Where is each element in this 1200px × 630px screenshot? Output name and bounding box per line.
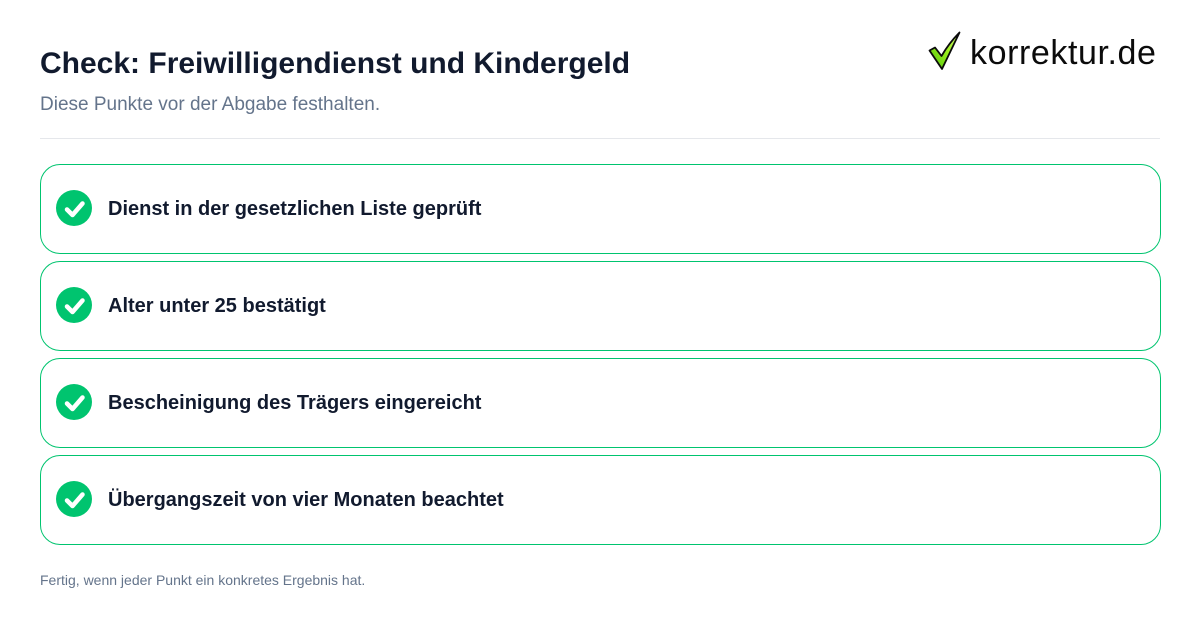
panel: checklist item 1 xyxy=(40,164,1161,254)
title: Check: Freiwilligendienst und Kindergeld xyxy=(40,47,630,80)
icon: green logo checkmark xyxy=(928,32,960,70)
panel: checklist item 4 xyxy=(40,455,1161,545)
panel: checklist item 3 xyxy=(40,358,1161,448)
icon: check circle xyxy=(56,287,92,323)
item text: Alter unter 25 bestätigt xyxy=(108,295,326,317)
subtitle: Diese Punkte vor der Abgabe festhalten. xyxy=(40,94,380,115)
item text: Bescheinigung des Trägers eingereicht xyxy=(108,392,481,414)
item text: Übergangszeit von vier Monaten beachtet xyxy=(108,489,504,511)
icon: check circle xyxy=(56,384,92,420)
logo: korrektur.de xyxy=(928,32,1156,72)
icon: check circle xyxy=(56,481,92,517)
item text: Dienst in der gesetzlichen Liste geprüft xyxy=(108,198,481,220)
icon: check circle xyxy=(56,190,92,226)
footer note: Fertig, wenn jeder Punkt ein konkretes Ergebnis hat. xyxy=(40,572,365,588)
panel: checklist item 2 xyxy=(40,261,1161,351)
logo wordmark: korrektur.de xyxy=(970,34,1156,72)
